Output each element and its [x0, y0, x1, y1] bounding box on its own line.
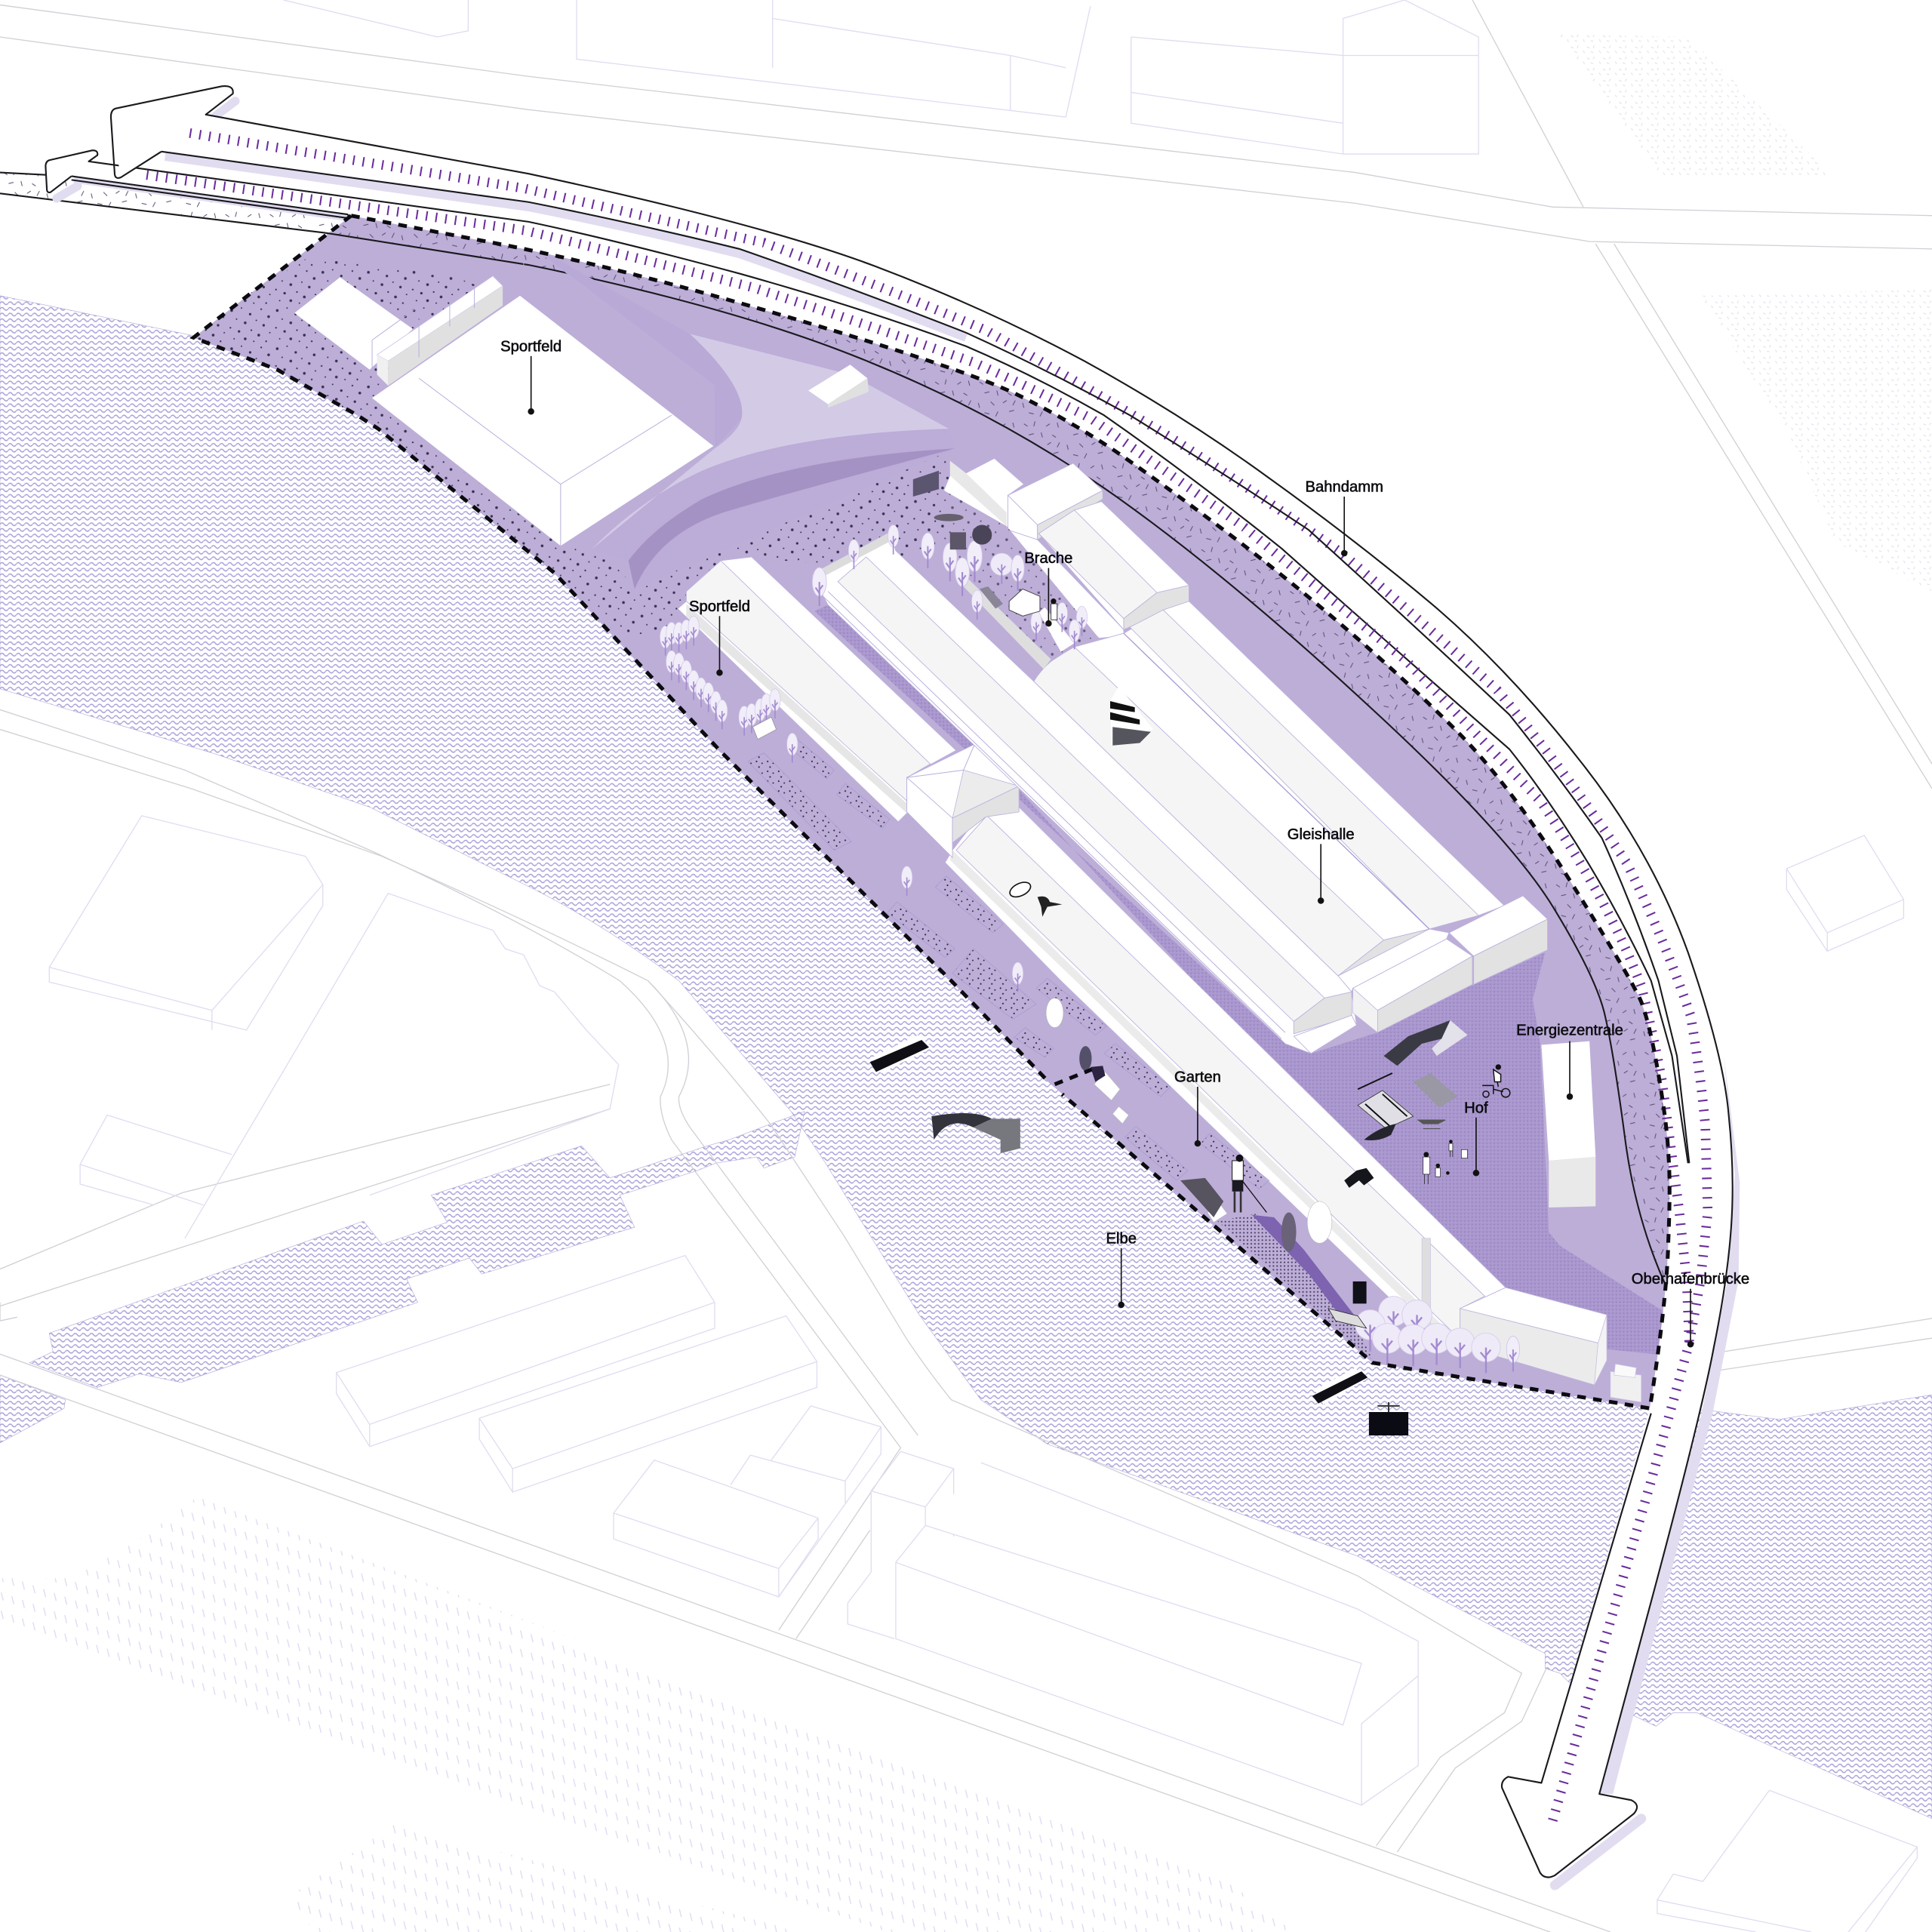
label: Energiezentrale [1516, 1022, 1623, 1100]
building: Hall C long shed [812, 532, 1357, 1054]
pictogram: black platform [1369, 1402, 1408, 1435]
building: grandstand [372, 276, 503, 386]
label: Brache: Brache [1024, 550, 1072, 567]
label: Gleishalle: Gleishalle [1287, 826, 1355, 843]
courtyard Hof [814, 605, 1671, 1355]
pictogram: reed [1180, 1178, 1223, 1217]
pictogram: Hof objects [1344, 1073, 1457, 1188]
label: Bahndamm [1305, 478, 1383, 556]
pictogram: cyclist [1482, 1065, 1510, 1097]
outer track ticks [189, 133, 1708, 1821]
building: north hall [1038, 501, 1189, 629]
shadow band inside deck under big arrow [165, 156, 966, 337]
railway yard tick rows [0, 1497, 1294, 1932]
building: central pavilion [907, 744, 1019, 857]
pictogram: plant with pot at garden notch [1079, 1046, 1105, 1081]
label: Sportfeld west [689, 598, 750, 676]
gravel on embankment [325, 216, 1670, 1294]
pictogram: textured bench on the water [870, 1035, 933, 1073]
building: Sportfeld hall [372, 296, 713, 546]
site ground [193, 216, 1670, 1408]
pictogram: hammock bed at Brache [980, 586, 1003, 609]
label: Oberhafenbrücke [1632, 1271, 1749, 1347]
chimney [1422, 1238, 1431, 1327]
faint gravel patches in the city [1558, 35, 1932, 592]
building: shed Sportfeld side [678, 557, 956, 822]
pictogram: dish and gull [1008, 879, 1062, 917]
label: Bahndamm: Bahndamm [1305, 478, 1383, 495]
second bridge line [162, 152, 1689, 1163]
building: east end blocks [1353, 896, 1548, 1032]
label: Sportfeld north: Sportfeld [500, 338, 561, 355]
big arrow and long bridge outline [111, 86, 1733, 1878]
building: Gleishalle [1034, 601, 1504, 992]
garden beds [748, 740, 1269, 1189]
label: Gleishalle [1287, 826, 1355, 904]
label: Oberhafenbrücke: Oberhafenbrücke [1632, 1271, 1749, 1287]
label: Sportfeld north [500, 338, 561, 415]
pictogram: photo on Gleishalle roof [1110, 686, 1153, 746]
label: Elbe: Elbe [1106, 1230, 1137, 1247]
pictogram: greenhouse [1009, 589, 1040, 616]
pictogram: plant in pond [1281, 1213, 1297, 1252]
building: north block [1008, 463, 1103, 540]
mound and plaza [524, 240, 955, 589]
pictogram: textured rock on the water [931, 1113, 1020, 1153]
label: Elbe [1106, 1230, 1137, 1308]
trees: southern cluster [1355, 1297, 1520, 1373]
inner track ticks [146, 175, 1689, 1343]
Brache garden [944, 491, 1099, 669]
building: Energiezentrale [1541, 1041, 1595, 1208]
shrubs and planters [1046, 998, 1332, 1243]
label: Garten [1174, 1069, 1221, 1146]
pictogram: barrel and log [1328, 1281, 1367, 1328]
building: wedge on plaza [808, 365, 869, 408]
pictogram: people in Hof [1423, 1140, 1467, 1184]
wetland stipple and pond at the southern tip [1217, 1214, 1374, 1361]
pictogram: fence at Brache [913, 471, 939, 497]
water: Elbe and harbour channels [0, 296, 1932, 1819]
dashed site boundary [193, 216, 1669, 1408]
building: long hall Garten side [945, 807, 1506, 1346]
small arrow outline [45, 150, 1688, 1163]
trees: Brache [812, 525, 1088, 649]
pictogram: plants and equipment at Brache [934, 514, 992, 549]
small substation [1611, 1364, 1641, 1402]
trees: Sportfeld row [660, 616, 1023, 992]
label: Brache [1024, 550, 1072, 626]
label: Hof [1464, 1100, 1488, 1177]
label: Sportfeld west: Sportfeld [689, 598, 750, 615]
pictogram: floating bench south [1312, 1367, 1367, 1404]
pictogram: person at Brache [1051, 598, 1057, 620]
pictogram: textured rock in Hof [1383, 1020, 1467, 1066]
stippled ground [193, 257, 974, 638]
label: Energiezentrale: Energiezentrale [1516, 1022, 1623, 1038]
building: end block south [1460, 1287, 1607, 1385]
building: back strip behind Brache [944, 458, 1124, 638]
big arrow head fill [111, 86, 296, 179]
building: Sportfeld annex [294, 277, 413, 370]
track edge under boundary [72, 176, 351, 218]
label: Garten: Garten [1174, 1069, 1221, 1085]
pictogram: worker [1232, 1155, 1266, 1213]
gravel strip beside the railway [0, 173, 347, 233]
shadow of the bridge [57, 101, 1641, 1885]
label: Hof: Hof [1464, 1100, 1488, 1116]
wagon by Sportfeld [753, 717, 777, 740]
